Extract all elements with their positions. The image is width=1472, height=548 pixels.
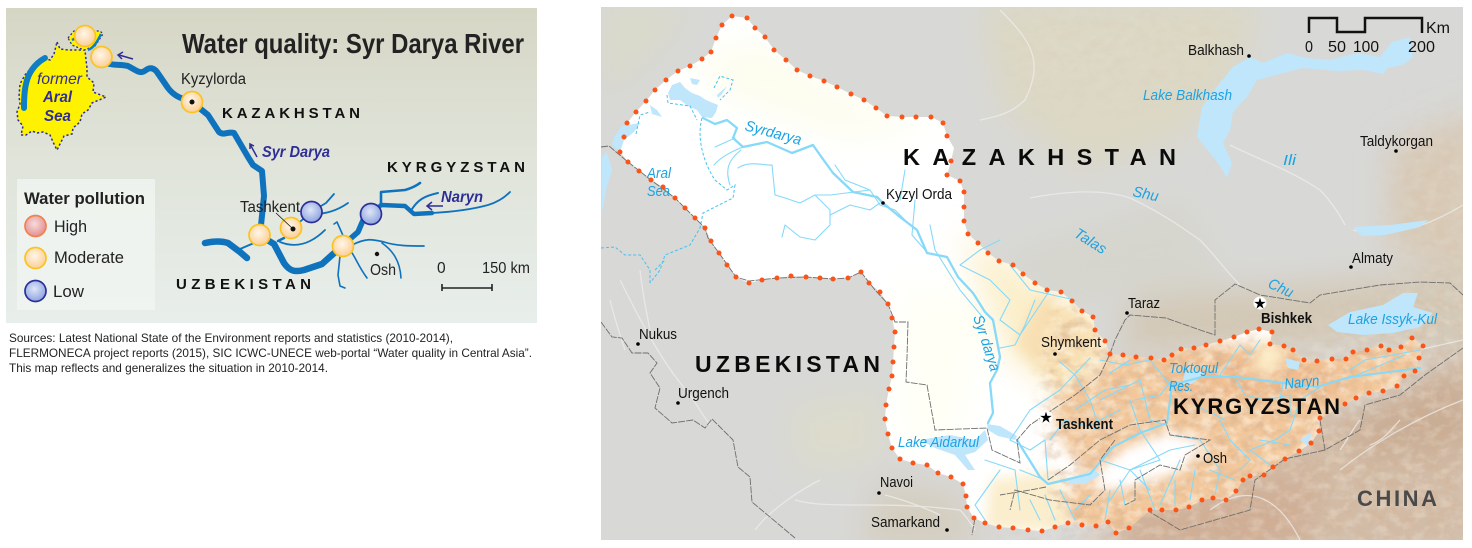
city labels and markers: Bishkek [1261,310,1313,327]
water body labels: Syrdarya [743,117,803,149]
city labels and markers [636,42,1433,532]
city labels and markers: Nukus [639,326,677,343]
city labels and markers: Osh [1203,450,1227,467]
labels: schematic map: UZBEKISTAN [176,276,311,293]
labels: schematic map: Tashkent [240,199,301,216]
city labels and markers: Almaty [1352,250,1393,267]
city labels and markers: Tashkent [1056,416,1113,433]
water body labels: Ili [1283,152,1297,169]
scale bar: schematic map: 150 km [482,260,530,277]
country labels: UZBEKISTAN [695,351,880,377]
city labels and markers: Kyzyl Orda [886,186,953,203]
basin area [621,16,1422,532]
city labels and markers: Urgench [678,385,729,402]
scale bar: schematic map: 0 [437,260,446,277]
country labels: CHINA [1357,486,1437,511]
country labels [695,144,1437,511]
scale bar: relief map: Km [1426,20,1450,37]
city labels and markers: Balkhash [1188,42,1244,59]
city labels and markers: Taldykorgan [1360,133,1433,150]
country labels: KAZAKHSTAN [903,144,1176,170]
lakes [602,37,1433,484]
labels: schematic map: former [37,71,83,88]
sources note: Sources: Latest National State of the Environment reports and statistics (2010-2014), [9,331,453,345]
panel: basin relief map [601,0,1472,548]
city labels and markers: ★ [1039,408,1053,426]
city labels and markers: Navoi [880,474,913,491]
political borders [601,146,1463,538]
water body labels: Talas [1071,225,1110,258]
sources note: This map reflects and generalizes the situation in 2010-2014. [9,361,328,375]
former Aral Sea [17,31,106,150]
city labels and markers: Samarkand [871,514,940,531]
relief background [601,0,1472,548]
labels: schematic map [37,71,525,293]
scale bar: relief map: 0 [1305,39,1313,56]
water body labels: Chu [1265,275,1297,302]
river: Syr Darya network [102,62,510,288]
water body labels: Shu [1131,183,1161,205]
city labels and markers: ★ [1253,294,1267,312]
labels: schematic map: Kyzylorda [181,71,246,88]
water body labels: Lake Aidarkul [898,434,980,451]
sources note [9,331,532,375]
legend: water pollution: Water pollution [24,190,145,208]
legend: water pollution: Low [53,283,84,301]
sources note: FLERMONECA project reports (2015), SIC ICWC-UNECE web-portal “Water quality in Central Asia”. [9,346,532,360]
rivers in basin [703,118,1420,520]
labels: schematic map: Aral [42,89,73,106]
labels: schematic map: KYRGYZSTAN [387,159,525,176]
panel: water quality schematic map [6,8,537,323]
dashed dry channels [601,76,735,283]
city labels and markers: Taraz [1128,295,1160,312]
labels: schematic map: Syr Darya [262,144,330,161]
water body labels: Lake Balkhash [1143,87,1232,104]
legend: water pollution: High [54,218,87,236]
scale bar: relief map [1305,18,1450,56]
legend: water pollution [17,179,155,310]
scale bar: relief map: 200 [1408,39,1435,56]
title: Water quality: Syr Darya River [182,28,524,59]
water body labels: Sea [647,183,670,200]
water body labels: Res. [1169,378,1193,395]
scale bar: relief map: 50 [1328,39,1346,56]
water body labels [646,87,1438,451]
scale bar: schematic map [437,260,530,291]
legend: water pollution: Moderate [54,249,124,267]
water body labels: Naryn [1284,372,1320,393]
labels: schematic map: Sea [44,108,71,125]
water body labels: Lake Issyk-Kul [1348,311,1438,328]
water body labels: Aral [646,165,672,182]
water body labels: Syr darya [969,313,1003,373]
country labels: KYRGYZSTAN [1173,394,1340,419]
basin boundary dots [618,14,1426,536]
water body labels: Toktogul [1169,360,1219,377]
labels: schematic map: Osh [370,262,396,279]
pale side rivers outside basin [610,10,1463,540]
city labels and markers: Shymkent [1041,334,1102,351]
scale bar: relief map: 100 [1353,39,1379,56]
labels: schematic map: Naryn [441,189,483,206]
arrows: flow direction [118,52,443,210]
labels: schematic map: KAZAKHSTAN [222,105,360,122]
pollution monitoring points [74,26,382,256]
